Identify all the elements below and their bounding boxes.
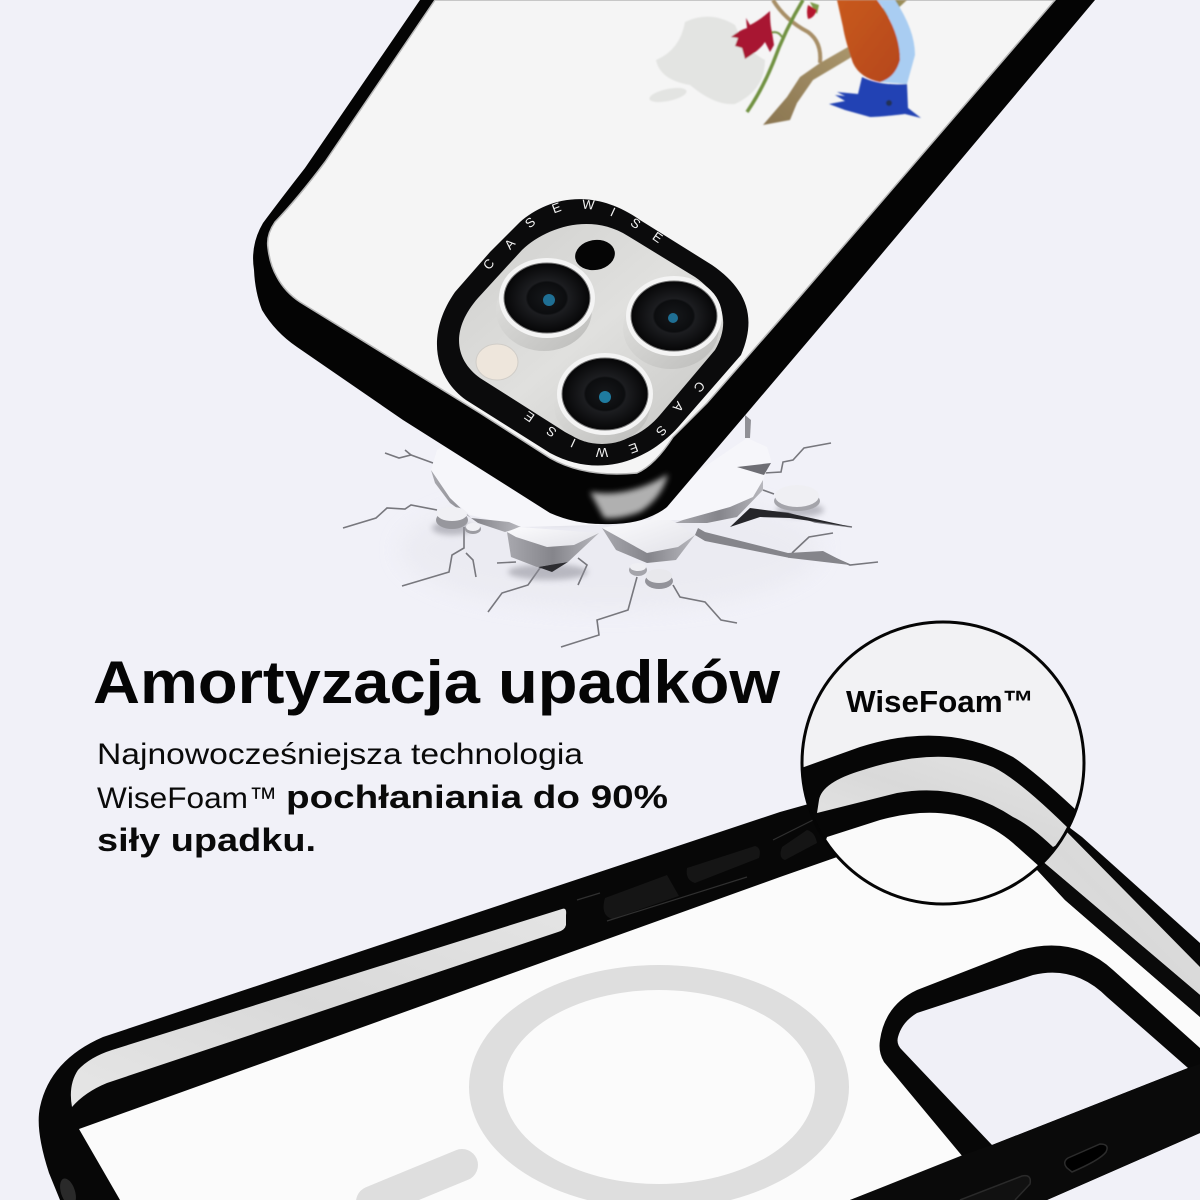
dark crack wedge: [730, 508, 852, 527]
brand text on bump: I: [608, 204, 618, 219]
callout: magnifier WiseFoam: [800, 620, 1086, 906]
brand text on bump: E: [521, 408, 537, 425]
phone top: case back with camera: [253, 0, 1095, 524]
flash: [476, 344, 518, 380]
lens two: [623, 276, 722, 369]
rubble piece centre right: [602, 520, 695, 563]
rubble small pieces: [436, 485, 820, 589]
magnifier ring: [802, 622, 1084, 904]
magnetic ring: [469, 965, 849, 1200]
port on bottom band: [1065, 1144, 1107, 1172]
brand text on bump: C: [691, 378, 708, 395]
bird eye: [886, 100, 892, 106]
body text: [97, 738, 668, 858]
branch: [763, 0, 907, 125]
brand text on bump: S: [628, 215, 644, 232]
buttons on top band: [577, 820, 817, 921]
magnifier label: WiseFoam™: [846, 684, 1034, 719]
microphone hole: [573, 237, 617, 273]
bird head: [829, 77, 921, 118]
brand text on bump: W: [582, 197, 596, 213]
large cracked slab right: [650, 415, 771, 523]
gray crack wedge: [695, 528, 850, 565]
clear back panel: [79, 830, 1200, 1200]
black frame: [39, 766, 1200, 1200]
crack lines: [343, 443, 878, 647]
pill mark: [372, 1165, 462, 1200]
body text: siły upadku.: [97, 822, 316, 858]
bumper gloss: [590, 474, 668, 518]
brand text on bump: E: [650, 229, 666, 246]
side button on bottom band: [960, 1176, 1030, 1200]
twig: [773, 0, 820, 63]
corner hole: [57, 1177, 79, 1200]
brand text on bump: W: [595, 445, 608, 460]
brand text on bump: A: [670, 399, 687, 415]
lens one: [496, 258, 595, 351]
camera cutout frame: [880, 946, 1200, 1157]
inner dark band edge: [1000, 830, 1200, 1017]
case black bumper: [253, 0, 1095, 524]
brand text on bump: A: [501, 236, 518, 252]
heading: Amortyzacja upadków: [93, 649, 780, 716]
illustration: bird on a branch: [648, 0, 921, 125]
flower: [731, 11, 782, 59]
body text: ™: [249, 782, 277, 815]
illustration: cracked surface: [343, 415, 878, 647]
rubble piece centre left: [507, 527, 599, 572]
brand text on bump: S: [653, 423, 670, 439]
body text: WiseFoam: [97, 782, 248, 815]
brand text on bump: E: [627, 440, 640, 457]
brand text on bump: S: [522, 214, 539, 231]
lens three: [554, 353, 653, 444]
foam strip left: [71, 909, 566, 1107]
body text: Najnowocześniejsza technologia: [97, 738, 583, 771]
large cracked slab left: [431, 430, 600, 532]
brand text on bump: [480, 197, 708, 460]
brand text on bump: C: [480, 256, 497, 273]
brand text on bump: E: [550, 199, 563, 216]
brand text on bump: I: [568, 436, 578, 451]
flower bud: [807, 2, 819, 19]
foam strip right: [1035, 825, 1200, 995]
body text: pochłaniania do 90%: [286, 779, 668, 815]
flower stem: [747, 0, 803, 112]
white back panel: [268, 0, 1055, 474]
apple logo: [648, 17, 765, 105]
camera bump: [437, 197, 748, 466]
bird belly: [877, 0, 915, 84]
magnified frame detail: [804, 736, 1075, 866]
brand text on bump: S: [543, 423, 559, 440]
soft shadows: [432, 503, 824, 580]
bird wing: [837, 0, 900, 82]
bottom band: [850, 1064, 1200, 1200]
phone bottom: open case interior: [39, 766, 1200, 1200]
